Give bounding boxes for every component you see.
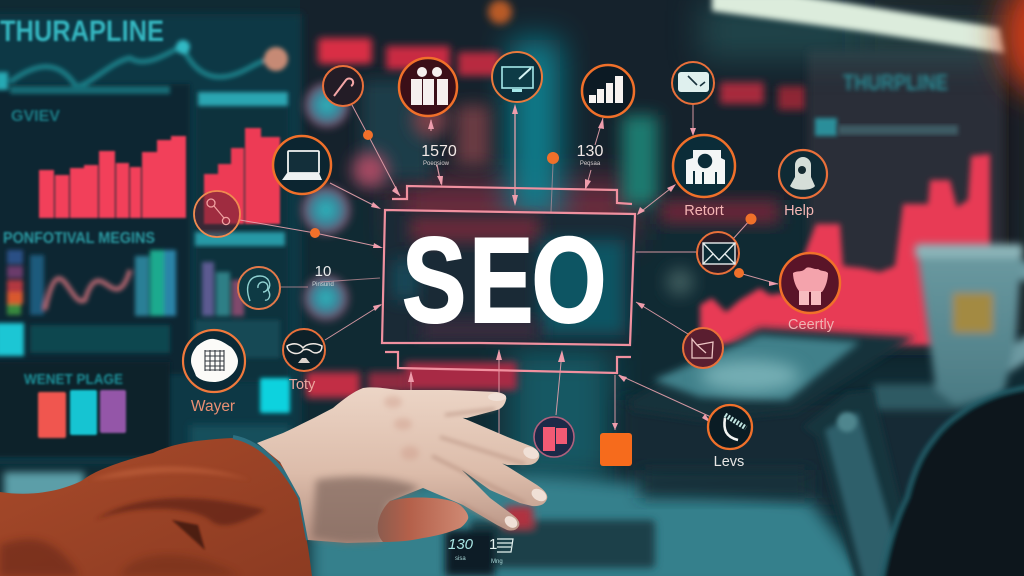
teal strip [195, 232, 285, 246]
icon: glasses [283, 329, 325, 371]
label: Wayer: Wayer [191, 398, 235, 415]
background: lower right dark [620, 400, 1024, 510]
background: desk [310, 475, 880, 576]
bottom readout: Mng [491, 559, 503, 565]
orbs and mid-column blur [260, 38, 806, 413]
multicolour chart [7, 250, 280, 358]
icon: report [673, 135, 735, 197]
label: value 130: Peqsaa [580, 161, 601, 167]
hand [257, 387, 549, 543]
icon: small mail [683, 328, 723, 368]
icon: head [238, 267, 280, 309]
left red bar chart [39, 136, 186, 218]
bottom readout [448, 536, 513, 565]
knuckles [384, 396, 419, 460]
label: Toty: Toty [289, 377, 316, 393]
icon: rising bars [582, 65, 634, 117]
icon: envelope [697, 232, 739, 274]
label: value 10: 10 [315, 263, 331, 280]
coloured blocks [38, 390, 126, 438]
background: teal below frame [510, 350, 610, 480]
icon: pen [323, 66, 363, 106]
label: Ceertly: Ceertly [788, 317, 835, 333]
label: lower heading: PONFOTIVAL MEGINS [3, 230, 155, 247]
SEO frame [382, 186, 635, 373]
icon: Wayer badge [183, 330, 245, 392]
monitor base glow [190, 425, 290, 455]
background: dark desk band [640, 470, 810, 498]
cyan square [0, 323, 24, 356]
bottom readout: 130 [448, 536, 474, 553]
label: value 10 [312, 263, 334, 288]
orange nodes [310, 130, 756, 278]
desk highlight [4, 472, 84, 500]
left monitor [0, 14, 302, 500]
right red bar chart [700, 154, 990, 345]
label: bottom panel heading: WENET PLAGE [24, 371, 123, 388]
background: blob right of frame [666, 268, 694, 296]
label: value 1570: Poeqsiow [423, 161, 450, 167]
icon: levels [708, 405, 752, 449]
icon: group [399, 58, 457, 116]
sleeve [0, 437, 312, 576]
icon: monitor [492, 52, 542, 102]
ghost title: THURPLINE [843, 70, 948, 95]
label: value 1570: 1570 [421, 143, 457, 160]
fingernails [488, 393, 549, 530]
icon: laptop [273, 136, 331, 194]
label: Help: Help [784, 203, 814, 219]
finger undersides [432, 409, 525, 528]
monitor title: THURAPLINE [0, 15, 164, 48]
icon: crown [780, 253, 840, 313]
background: centre right green column [622, 115, 658, 205]
connector arrowheads [371, 104, 778, 430]
icon: help [779, 150, 827, 198]
icon: chain link [194, 191, 240, 237]
icon: squares [534, 417, 574, 457]
SEO diagram connectors [240, 104, 778, 437]
icon: mail card [672, 62, 714, 104]
keyboard on desk [445, 506, 655, 576]
label: Retort: Retort [684, 203, 724, 219]
background: centre glow red [395, 180, 635, 240]
right panel with bar chart [700, 50, 1003, 350]
thumb [378, 497, 468, 542]
background: centre teal band [510, 40, 560, 220]
hand back and fingers [257, 387, 547, 543]
background: top right dark corner [860, 0, 1024, 340]
middle red bar chart [204, 128, 280, 224]
SEO frame backdrop [382, 210, 635, 345]
top light streak [488, 0, 1024, 95]
label: Levs: Levs [714, 454, 744, 470]
label: value 10: Pinsund [312, 282, 334, 288]
bottom readout: 1 [489, 536, 497, 553]
coffee mug [873, 244, 1024, 410]
tablet on desk [630, 328, 915, 420]
chair and monitor arm [803, 385, 1024, 576]
line chart [0, 40, 288, 106]
SEO wordmark: SEO [402, 212, 607, 349]
bottom readout: sisa [455, 556, 466, 562]
palm shadow [312, 477, 420, 543]
label: chart heading: GVIEV [11, 108, 60, 125]
label: value 130: 130 [577, 143, 603, 160]
icon: orange square [600, 433, 632, 466]
